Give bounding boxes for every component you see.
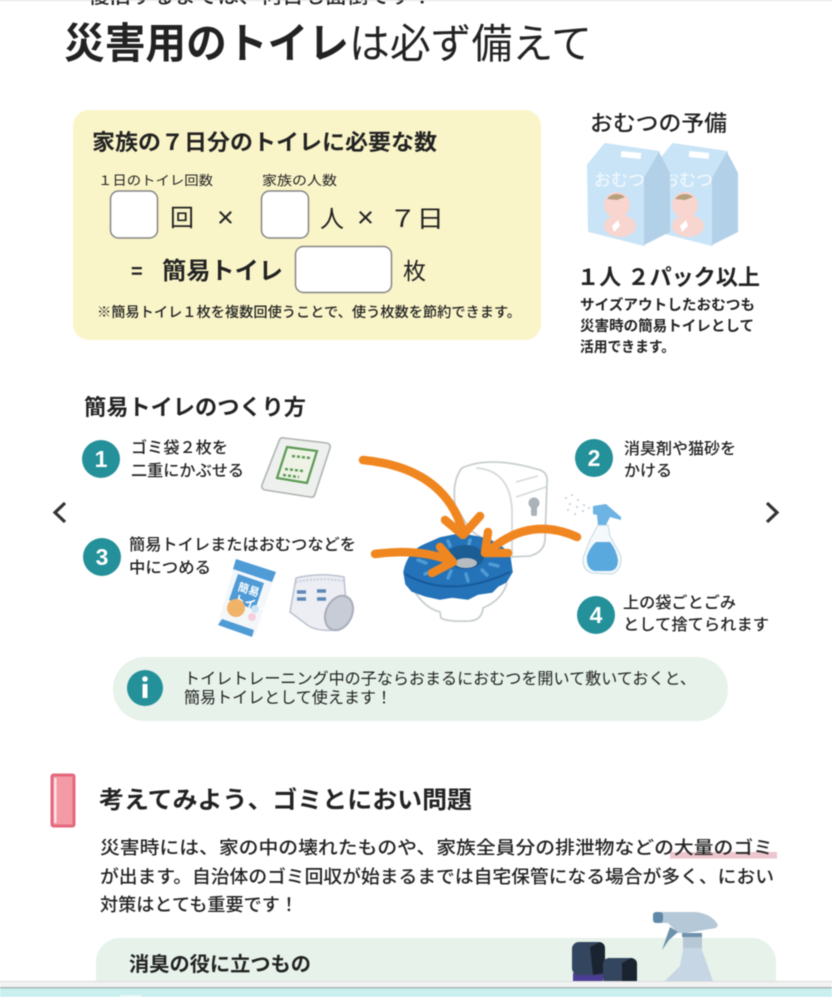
title: 災害用のトイレ — [64, 20, 349, 67]
icon: diaper packs — [588, 144, 738, 245]
step 1 — [82, 438, 244, 480]
section marker — [52, 775, 74, 826]
step 4: 上の袋ごとごみ — [623, 594, 736, 612]
step 3: 中につめる — [129, 559, 211, 577]
carousel arrow: previous — [55, 503, 65, 522]
tip text — [184, 669, 696, 707]
icon: diaper packs: おむつ — [594, 171, 645, 190]
step 2: 消臭剤や猫砂を — [624, 439, 736, 458]
step 2: 2 — [588, 445, 600, 471]
step 3: 3 — [96, 544, 108, 570]
diaper quantity: １人 ２パック以上 — [577, 265, 760, 290]
diaper description: サイズアウトしたおむつも — [580, 296, 755, 314]
calculator heading: 家族の７日分のトイレに必要な数 — [92, 130, 437, 155]
step 2: かける — [624, 463, 672, 480]
browser bottom bar — [0, 981, 832, 997]
icon: simple toilet packet: 簡易 — [236, 580, 261, 600]
formula line two: 枚 — [403, 258, 426, 284]
step 2 — [575, 439, 736, 480]
panel: diaper reserve — [577, 111, 760, 356]
diaper reserve heading: おむつの予備 — [590, 111, 727, 136]
illustration: toilet with blue bag — [404, 462, 547, 621]
section paragraph: 対策はとても重要です！ — [100, 895, 298, 915]
step 4: として捨てられます — [623, 616, 769, 634]
input box: uses — [110, 191, 158, 238]
icon: simple toilet packet: トイレ — [232, 592, 267, 615]
formula line one — [170, 202, 444, 234]
step 1: ゴミ袋２枚を — [131, 438, 228, 457]
icon: large spray bottle — [653, 912, 718, 984]
diaper description — [580, 296, 755, 356]
tip text: 簡易トイレとして使えます！ — [184, 689, 392, 707]
diaper description: 活用できます。 — [580, 339, 675, 356]
heading: how to make a simple toilet: 簡易トイレのつくり方 — [84, 395, 306, 420]
calculator note: ※簡易トイレ１枚を複数回使うことで、使う枚数を節約できます。 — [97, 304, 521, 320]
arrow: from bags to toilet — [363, 460, 480, 535]
tip text: トイレトレーニング中の子ならおまるにおむつを開いて敷いておくと、 — [184, 669, 696, 688]
section paragraph — [100, 837, 774, 915]
title: は必ず備えて — [349, 21, 592, 67]
icon: spray bottle — [565, 494, 621, 574]
arrow: from packets to toilet — [375, 547, 453, 573]
step 4 — [577, 594, 769, 634]
label: family members: 家族の人数 — [262, 173, 337, 188]
step 3 — [83, 535, 356, 577]
formula line one: 人 — [320, 206, 344, 233]
panel: deodorizing items — [96, 912, 776, 997]
step 1: 二重にかぶせる — [131, 462, 244, 480]
icon: diaper — [290, 575, 358, 635]
icon: dark bottles — [572, 942, 637, 984]
section paragraph: が出ます。自治体のゴミ回収が始まるまでは自宅保管になる場合が多く、におい — [100, 866, 774, 887]
deodorizing heading: 消臭の役に立つもの — [129, 953, 311, 976]
carousel arrow: next — [767, 503, 777, 522]
callout: toilet training tip — [113, 657, 728, 721]
section heading: 考えてみよう、ゴミとにおい問題 — [99, 786, 472, 814]
section paragraph: 災害時には、家の中の壊れたものや、家族全員分の排泄物などの大量のゴミ — [100, 837, 773, 858]
formula line one: ７日 — [389, 206, 444, 233]
step 3: 簡易トイレまたはおむつなどを — [129, 535, 356, 554]
step 1: 1 — [95, 446, 108, 472]
formula line one: × — [217, 202, 234, 234]
highlight underline — [670, 852, 777, 858]
arrow: from spray to toilet — [485, 529, 577, 553]
formula line one: × — [357, 202, 374, 234]
step 4: 4 — [590, 602, 603, 628]
icon: information — [127, 670, 163, 706]
formula line two — [131, 246, 426, 292]
formula line two: 簡易トイレ — [162, 258, 283, 285]
formula line one: 回 — [170, 205, 194, 232]
panel: toilet count calculator — [73, 110, 541, 340]
icon: garbage bag package — [262, 438, 330, 497]
diaper description: 災害時の簡易トイレとして — [580, 317, 754, 335]
title — [64, 20, 592, 67]
icon: diaper packs: おむつ — [662, 171, 713, 190]
label: toilet uses per day: １日のトイレ回数 — [98, 173, 213, 188]
input box: people — [262, 191, 308, 238]
icon: simple toilet packet — [218, 559, 276, 637]
formula line two: = — [131, 261, 143, 283]
